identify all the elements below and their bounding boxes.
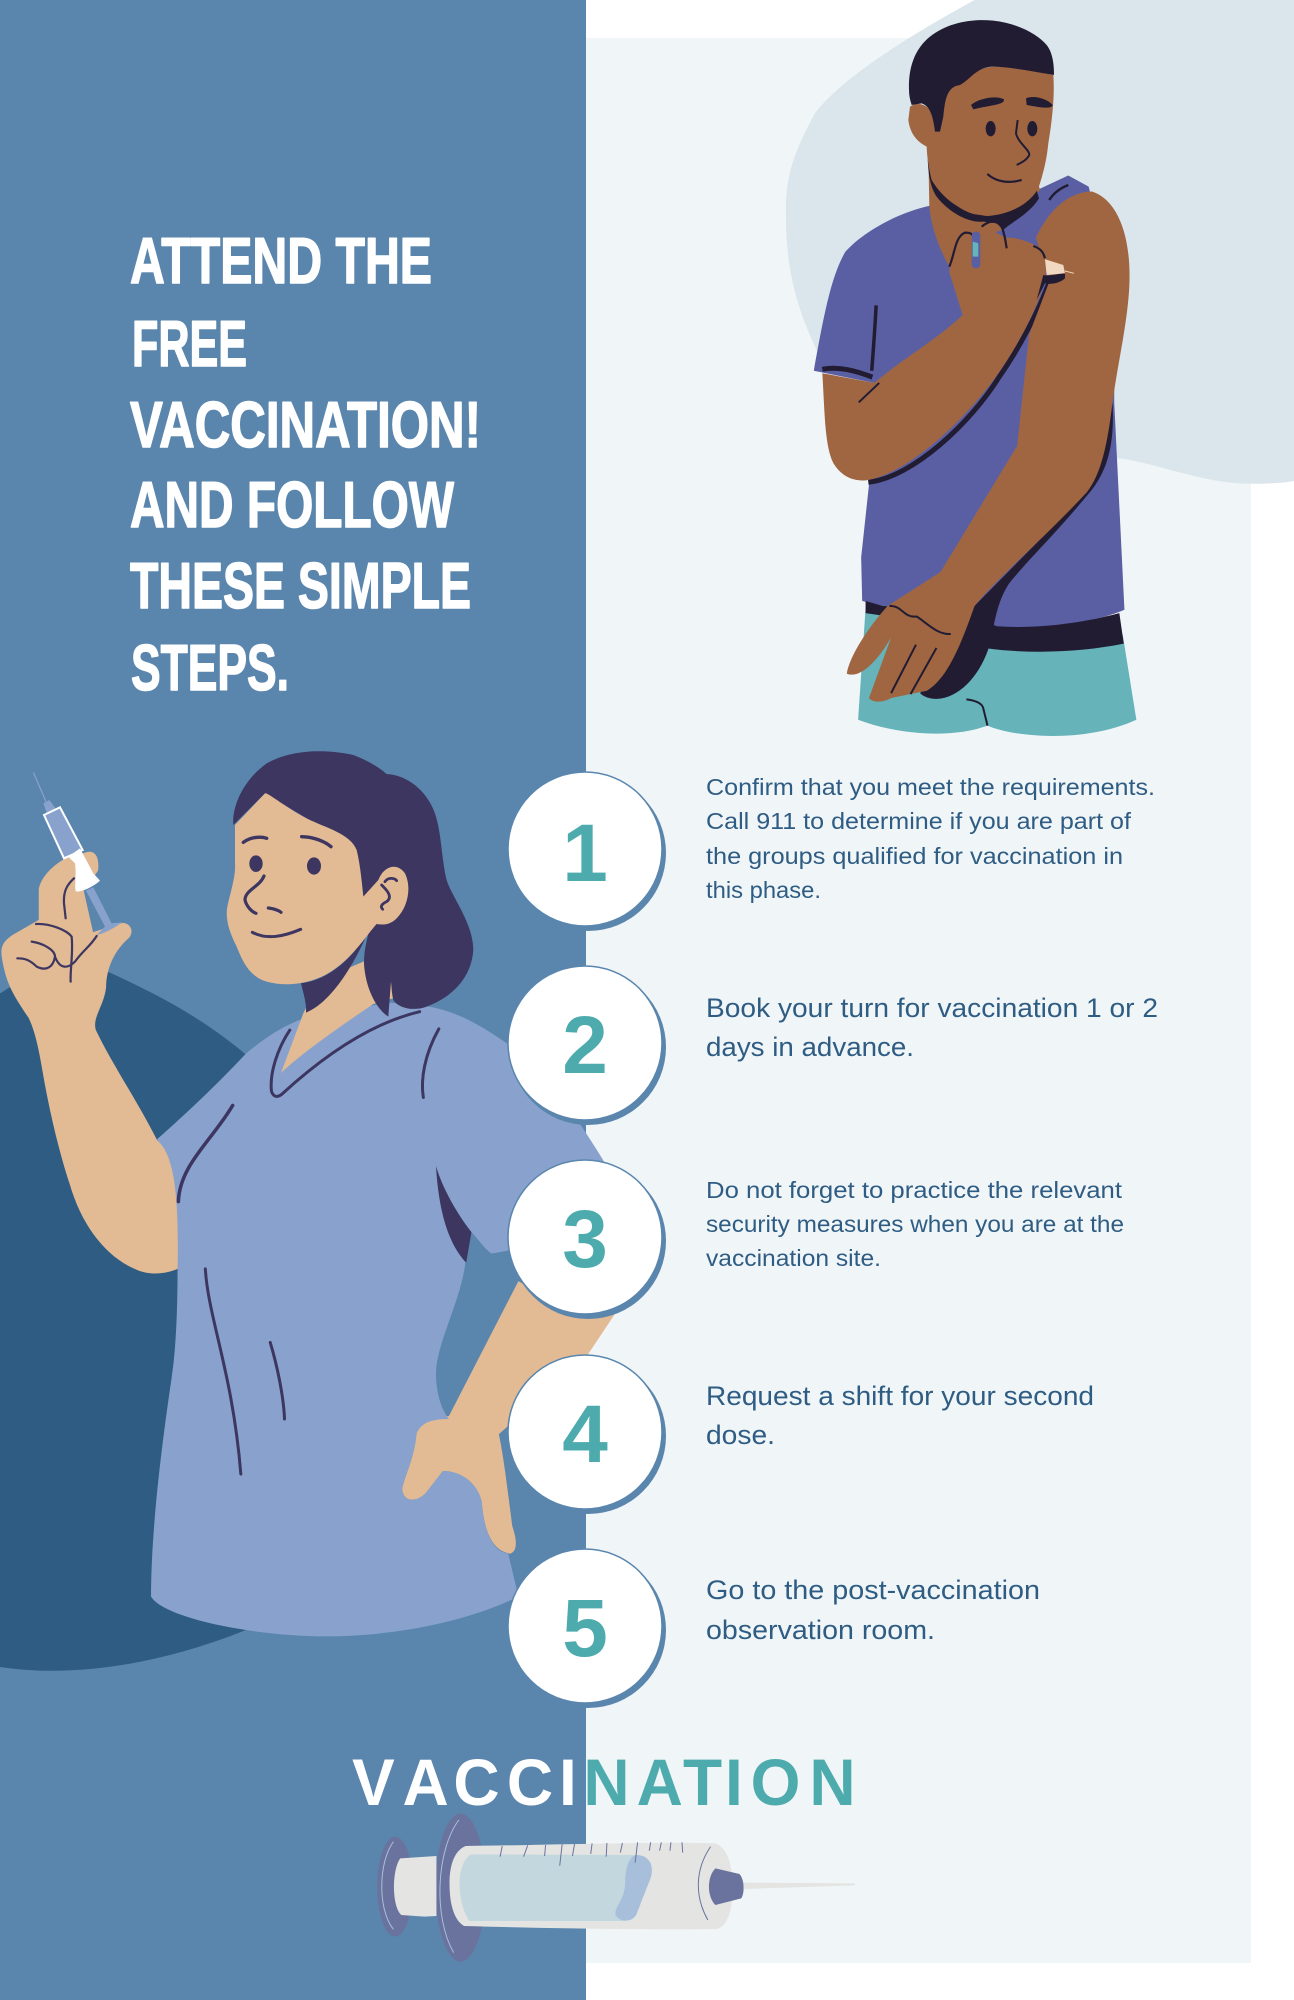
background blob behind man [786,0,1294,484]
syringe cap [1045,259,1065,275]
step 3 badge [508,1160,666,1319]
step 2 text [706,993,1158,1062]
plunger flanges [377,1837,413,1937]
finger lines [949,222,1045,267]
shoulder crease [1049,185,1068,200]
step 5 text: Go to the post-vaccination [706,1575,1040,1605]
liquid [460,1854,640,1921]
raised upper arm and hand [847,191,1130,702]
syringe needle [1065,271,1074,273]
man body [814,175,1136,736]
illustration: nurse holding syringe [1,751,616,1636]
hand creases and pocket [859,383,988,726]
sleeve fold [872,305,876,371]
neck [928,127,1040,267]
face and ear [227,793,408,984]
tunic [151,1003,616,1636]
white plunger [68,848,100,892]
panel: light right background [586,38,1251,1963]
heading: FREE [132,307,247,380]
arm shadow [920,402,1113,699]
background circle behind nurse [0,963,253,1671]
neck [281,950,393,1073]
heading: STEPS. [131,631,289,704]
vaccination wordmark: VACCI [352,1745,577,1819]
step 5 text [706,1575,1040,1645]
syringe liquid [973,242,978,257]
step 5 text: observation room. [706,1615,935,1645]
flange highlights [382,1820,459,1953]
stem [86,887,122,935]
heading: THESE SIMPLE [130,549,471,622]
step 1 text: the groups qualified for vaccination in [706,843,1123,869]
nose [1016,120,1029,165]
ear lines [381,878,397,909]
step 1 text [706,774,1155,903]
step 1 text: this phase. [706,877,821,903]
bent arm [822,223,1046,480]
ear [908,104,940,147]
sleeve band and creases [822,368,872,377]
step 1 text: Confirm that you meet the requirements. [706,774,1155,800]
heading: AND FOLLOW [130,468,454,541]
nurse head [227,751,473,1073]
plunger rod [394,1856,436,1917]
mouth [987,174,1022,182]
step 2 badge: 2 [562,1000,608,1091]
rubber seal [615,1855,652,1921]
illustration: large syringe [377,1814,855,1962]
step 2 text: days in advance. [706,1032,914,1062]
step 2 badge [508,966,666,1125]
mouth [252,929,301,937]
step 2 text: Book your turn for vaccination 1 or 2 [706,993,1158,1023]
tunic lines [178,1012,439,1474]
needle [744,1883,855,1889]
step 1 badge: 1 [562,808,608,899]
nose [245,876,281,913]
nurse left arm [402,1281,616,1554]
hair [233,751,473,1017]
vaccination wordmark [352,1745,856,1819]
thumb nail and shadow [1037,273,1065,300]
step 3 text [706,1177,1124,1271]
needle [33,772,46,802]
face [927,67,1054,216]
step 3 text: security measures when you are at the [706,1211,1124,1237]
step 5 badge: 5 [562,1583,608,1674]
nurse arm and tunic lines [1,852,471,1474]
step 3 text: Do not forget to practice the relevant [706,1177,1123,1203]
eyes [249,855,321,875]
hub [43,800,56,813]
forearm shadow [868,281,1050,482]
step 1 badge [508,772,666,931]
eyebrows [971,97,1053,109]
step 4 badge [508,1355,666,1514]
syringe barrel [972,232,980,268]
step 4 text: dose. [706,1420,775,1450]
heading [130,224,481,704]
graduation ticks [500,1842,711,1920]
step 3 text: vaccination site. [706,1245,881,1271]
step 1 text: Call 911 to determine if you are part of [706,808,1132,834]
illustration: man receiving vaccine [814,20,1136,736]
barrel [450,1843,733,1929]
man hand and syringe [949,185,1074,300]
heading: ATTEND THE [130,224,432,297]
neck shadow [301,933,368,1013]
heading: VACCINATION! [130,388,481,461]
raised arm and hand [1,852,178,1274]
nurse body [151,1003,616,1636]
needle hub [709,1868,744,1905]
panel: blue left column [0,0,586,2000]
step 4 text [706,1381,1094,1450]
waistband [866,601,1124,652]
step 5 badge [508,1549,666,1708]
finger lines [17,878,97,982]
sleeve shadow [436,1166,471,1263]
eyebrows [243,837,331,847]
step 3 badge: 3 [562,1194,608,1285]
shorts [858,608,1136,736]
hand syringe [17,772,122,982]
man arms [822,191,1130,726]
hair [909,20,1054,132]
vaccination wordmark: NATION [583,1745,856,1819]
step 4 badge: 4 [562,1389,608,1480]
man head [908,20,1054,267]
shirt [814,175,1124,628]
step 4 text: Request a shift for your second [706,1381,1094,1411]
neck shadow [928,158,1039,230]
eyes [986,121,1037,136]
barrel [44,807,83,858]
